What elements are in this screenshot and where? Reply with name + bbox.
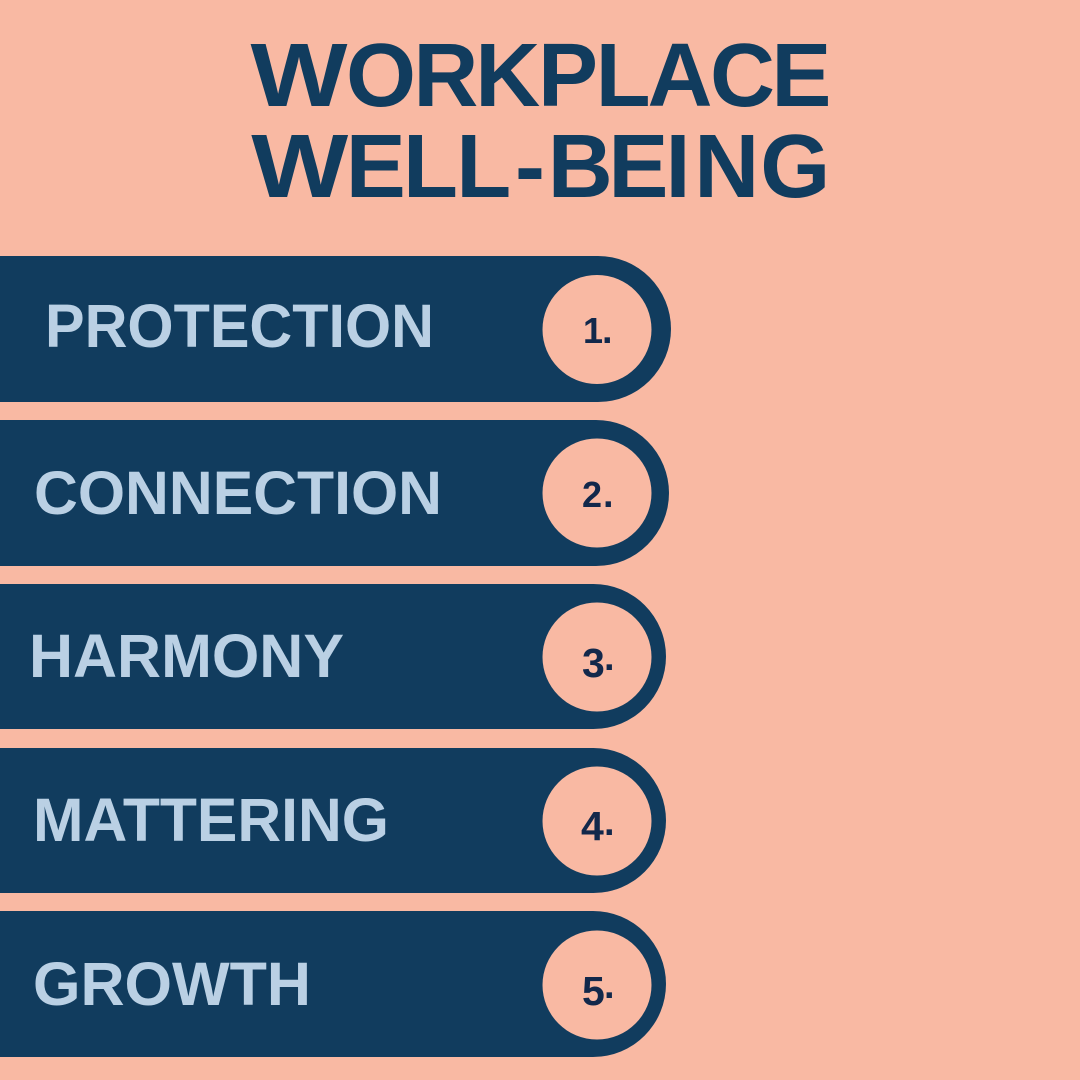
label: connection: CONNECTION — [34, 459, 442, 527]
number 5: 5 — [582, 968, 605, 1014]
number 3: 3 — [582, 640, 605, 686]
number 2: . — [603, 474, 614, 516]
number 2: 2 — [582, 474, 602, 515]
title — [250, 26, 831, 217]
panel: growth — [0, 911, 666, 1057]
label: growth: GROWTH — [33, 950, 311, 1018]
number 1: . — [602, 310, 613, 352]
number 1: 1 — [583, 310, 603, 351]
panel: harmony — [0, 584, 666, 729]
number 4: 4 — [581, 803, 604, 849]
label: harmony: HARMONY — [29, 622, 344, 690]
label: mattering: MATTERING — [33, 786, 389, 854]
panel: protection — [0, 256, 671, 402]
label: protection: PROTECTION — [45, 292, 434, 360]
title: W — [250, 26, 348, 126]
title: ORKPLACE — [346, 26, 831, 126]
number 5: . — [604, 965, 615, 1007]
panel: mattering — [0, 748, 666, 893]
number 4: . — [604, 802, 615, 844]
panel: connection — [0, 420, 669, 566]
number 3: . — [604, 637, 615, 679]
title: W — [251, 117, 348, 217]
title: ELL-BEING — [346, 117, 830, 217]
